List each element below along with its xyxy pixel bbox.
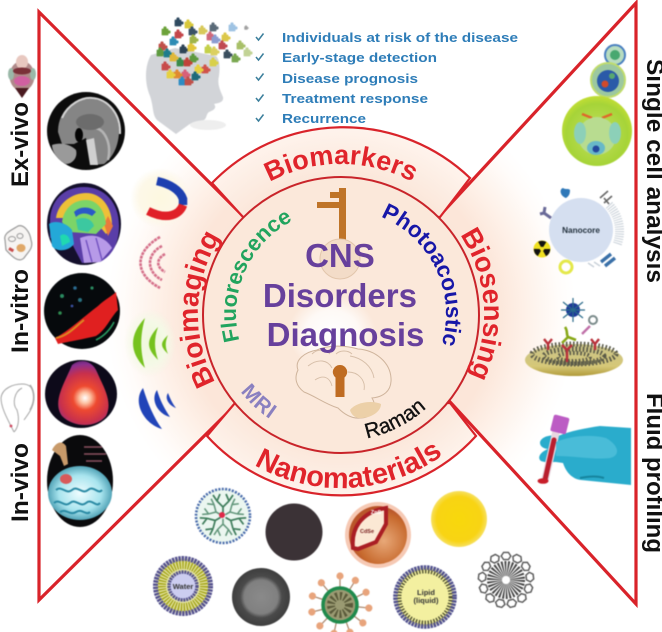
- particle: graphene wheel: [478, 552, 534, 608]
- icon: mouse: [1, 384, 34, 432]
- band: bottom arc: [207, 403, 476, 495]
- particle: core-shell quantum dot: [345, 502, 411, 568]
- image: colored brain scan: [47, 183, 121, 265]
- label: Nanomaterials: Nanomaterials: [256, 444, 440, 488]
- key shaft: [339, 188, 346, 246]
- large cell: [562, 96, 632, 166]
- imaging modality icons: [124, 168, 190, 429]
- small cell: [605, 45, 625, 65]
- image: gloved hand with blood tube: [538, 414, 631, 485]
- label: In-vivo: In-vivo: [7, 443, 34, 522]
- image: petri dish: [47, 435, 113, 527]
- ligand: blue fin: [561, 188, 570, 198]
- checklist text: Treatment response: [282, 91, 428, 106]
- capture antibodies: [544, 339, 599, 362]
- brain folds: [308, 350, 374, 390]
- particle: carbon dot: [266, 504, 322, 560]
- icon: ex-vivo brain slice: [8, 55, 36, 98]
- particle: functionalized micelle: [307, 572, 373, 632]
- key tooth short: [330, 192, 340, 198]
- ligand: antibody: [540, 207, 551, 218]
- sensor disc: [525, 344, 623, 376]
- core label: CdSe: [360, 529, 374, 535]
- cerebellum: [350, 402, 381, 418]
- ligand arcs: [609, 205, 620, 245]
- icon: key bow brain: [320, 239, 360, 279]
- checkmarks: [256, 34, 264, 121]
- glove: [539, 426, 631, 485]
- lipid label: (liquid): [414, 596, 439, 605]
- checklist text: Recurrence: [282, 111, 366, 126]
- particle: liposome: [156, 558, 210, 614]
- label: Photoacoustic: Photoacoustic: [382, 203, 462, 346]
- icon: key: [317, 188, 346, 246]
- particle: TEM core shell: [232, 568, 290, 626]
- left side labels: [7, 102, 34, 522]
- image: single cells: [562, 45, 632, 166]
- imaging circles: [44, 92, 125, 527]
- bound molecules: [562, 327, 576, 343]
- thumb: [556, 436, 617, 459]
- icon: head with puzzle pieces: [146, 17, 253, 134]
- key tooth long: [317, 202, 340, 208]
- image: thermal hot spot: [58, 361, 109, 425]
- nanomaterials: [156, 489, 534, 632]
- biosensing illustrations: [525, 45, 632, 485]
- medium cell: [591, 63, 625, 97]
- icon: in-vitro cell: [5, 226, 32, 260]
- icon: green waves: [124, 309, 176, 377]
- checklist text: Early-stage detection: [282, 50, 437, 65]
- image: nanocore particle: [534, 188, 620, 273]
- label: Raman: Raman: [364, 401, 426, 438]
- icon: magnet: [130, 168, 190, 228]
- label: In-vitro: In-vitro: [7, 269, 34, 353]
- image: thermal glow: [45, 360, 117, 428]
- white glow: [288, 295, 376, 371]
- inner disc: [203, 177, 479, 453]
- icon: brain with keyhole: [296, 346, 391, 418]
- title: Diagnosis: [267, 316, 424, 353]
- shadow: [190, 120, 226, 130]
- keyhole: [333, 365, 347, 397]
- image: fluorescence micrograph: [44, 273, 120, 349]
- ligand: radiation: [534, 240, 550, 258]
- checklist text: Disease prognosis: [282, 71, 418, 86]
- label: Bioimaging: Bioimaging: [180, 231, 222, 389]
- liposome label: Water: [173, 582, 193, 591]
- shell label: ZnS: [371, 510, 382, 516]
- particle: gold nanoparticle: [431, 491, 487, 547]
- particle: dendrimer: [196, 489, 250, 543]
- right side labels: [641, 59, 662, 553]
- label: Ex-vivo: Ex-vivo: [7, 102, 34, 187]
- core: [549, 198, 613, 262]
- puzzle pieces: [157, 17, 253, 85]
- blood tube: [538, 414, 570, 484]
- image: grayscale MRI: [47, 92, 125, 170]
- band: top arc: [212, 127, 470, 217]
- icon: pink waves: [140, 237, 165, 288]
- checklist text: Individuals at risk of the disease: [282, 30, 518, 45]
- title: Disorders: [263, 277, 417, 314]
- checklist text: [282, 30, 518, 126]
- label: Biosensing: Biosensing: [461, 226, 502, 380]
- label: Fluorescence: Fluorescence: [220, 212, 290, 342]
- biomarkers checklist: [256, 30, 518, 126]
- head silhouette: [146, 48, 223, 134]
- lipid label: Lipid: [417, 588, 435, 597]
- icon: blue waves: [139, 388, 176, 429]
- label: Biomarkers: Biomarkers: [263, 146, 416, 181]
- particle: lipid nanoparticle: [396, 568, 454, 626]
- small side icons: [1, 55, 36, 432]
- brain outline: [296, 346, 391, 418]
- label: MRI: MRI: [241, 383, 277, 418]
- ligand: crescent: [560, 261, 572, 273]
- right wedge: [359, 3, 636, 604]
- core label: Nanocore: [562, 226, 600, 235]
- central diagram: [180, 126, 502, 496]
- nanopillars: [532, 344, 616, 364]
- title: CNS: [305, 237, 375, 274]
- image: biosensor surface: [525, 298, 623, 376]
- analyte star: [561, 298, 585, 322]
- left wedge: [39, 12, 334, 600]
